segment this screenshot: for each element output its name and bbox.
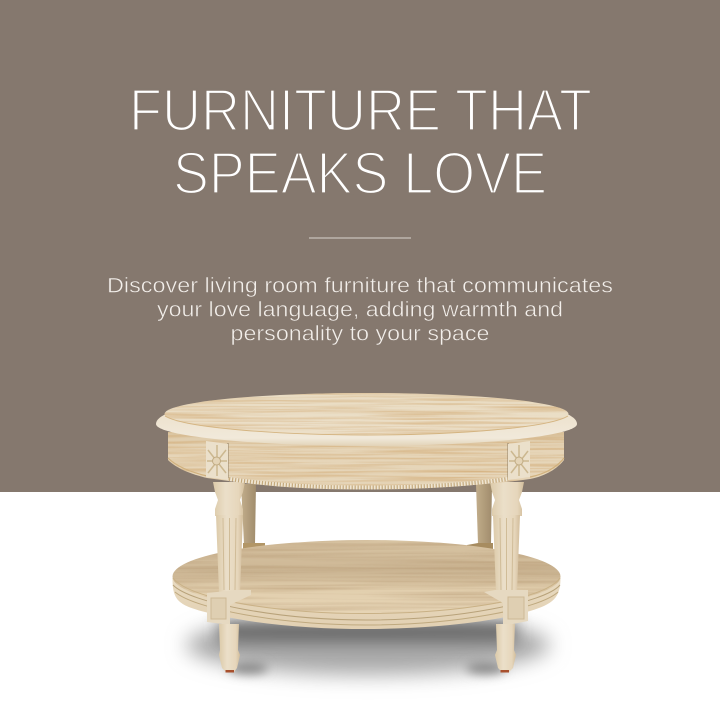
description text: Discover living room furniture that communicates xyxy=(107,274,613,298)
floor shadow xyxy=(186,615,550,675)
round table top xyxy=(156,393,577,446)
description text: your love language, adding warmth and xyxy=(157,298,563,322)
rope trim xyxy=(229,479,508,488)
coffee table xyxy=(156,393,577,672)
back legs xyxy=(241,484,493,552)
title: FURNITURE THAT xyxy=(129,76,592,144)
title: SPEAKS LOVE xyxy=(173,140,547,206)
right rosette block xyxy=(508,441,530,480)
title xyxy=(129,76,592,206)
brown background panel xyxy=(0,0,720,492)
description text xyxy=(107,274,613,346)
description text: personality to your space xyxy=(230,322,490,346)
front right leg xyxy=(484,482,528,672)
front left leg xyxy=(207,482,251,672)
apron xyxy=(168,432,564,489)
left rosette block xyxy=(206,441,228,480)
divider line xyxy=(309,238,411,239)
lower shelf xyxy=(172,540,560,629)
